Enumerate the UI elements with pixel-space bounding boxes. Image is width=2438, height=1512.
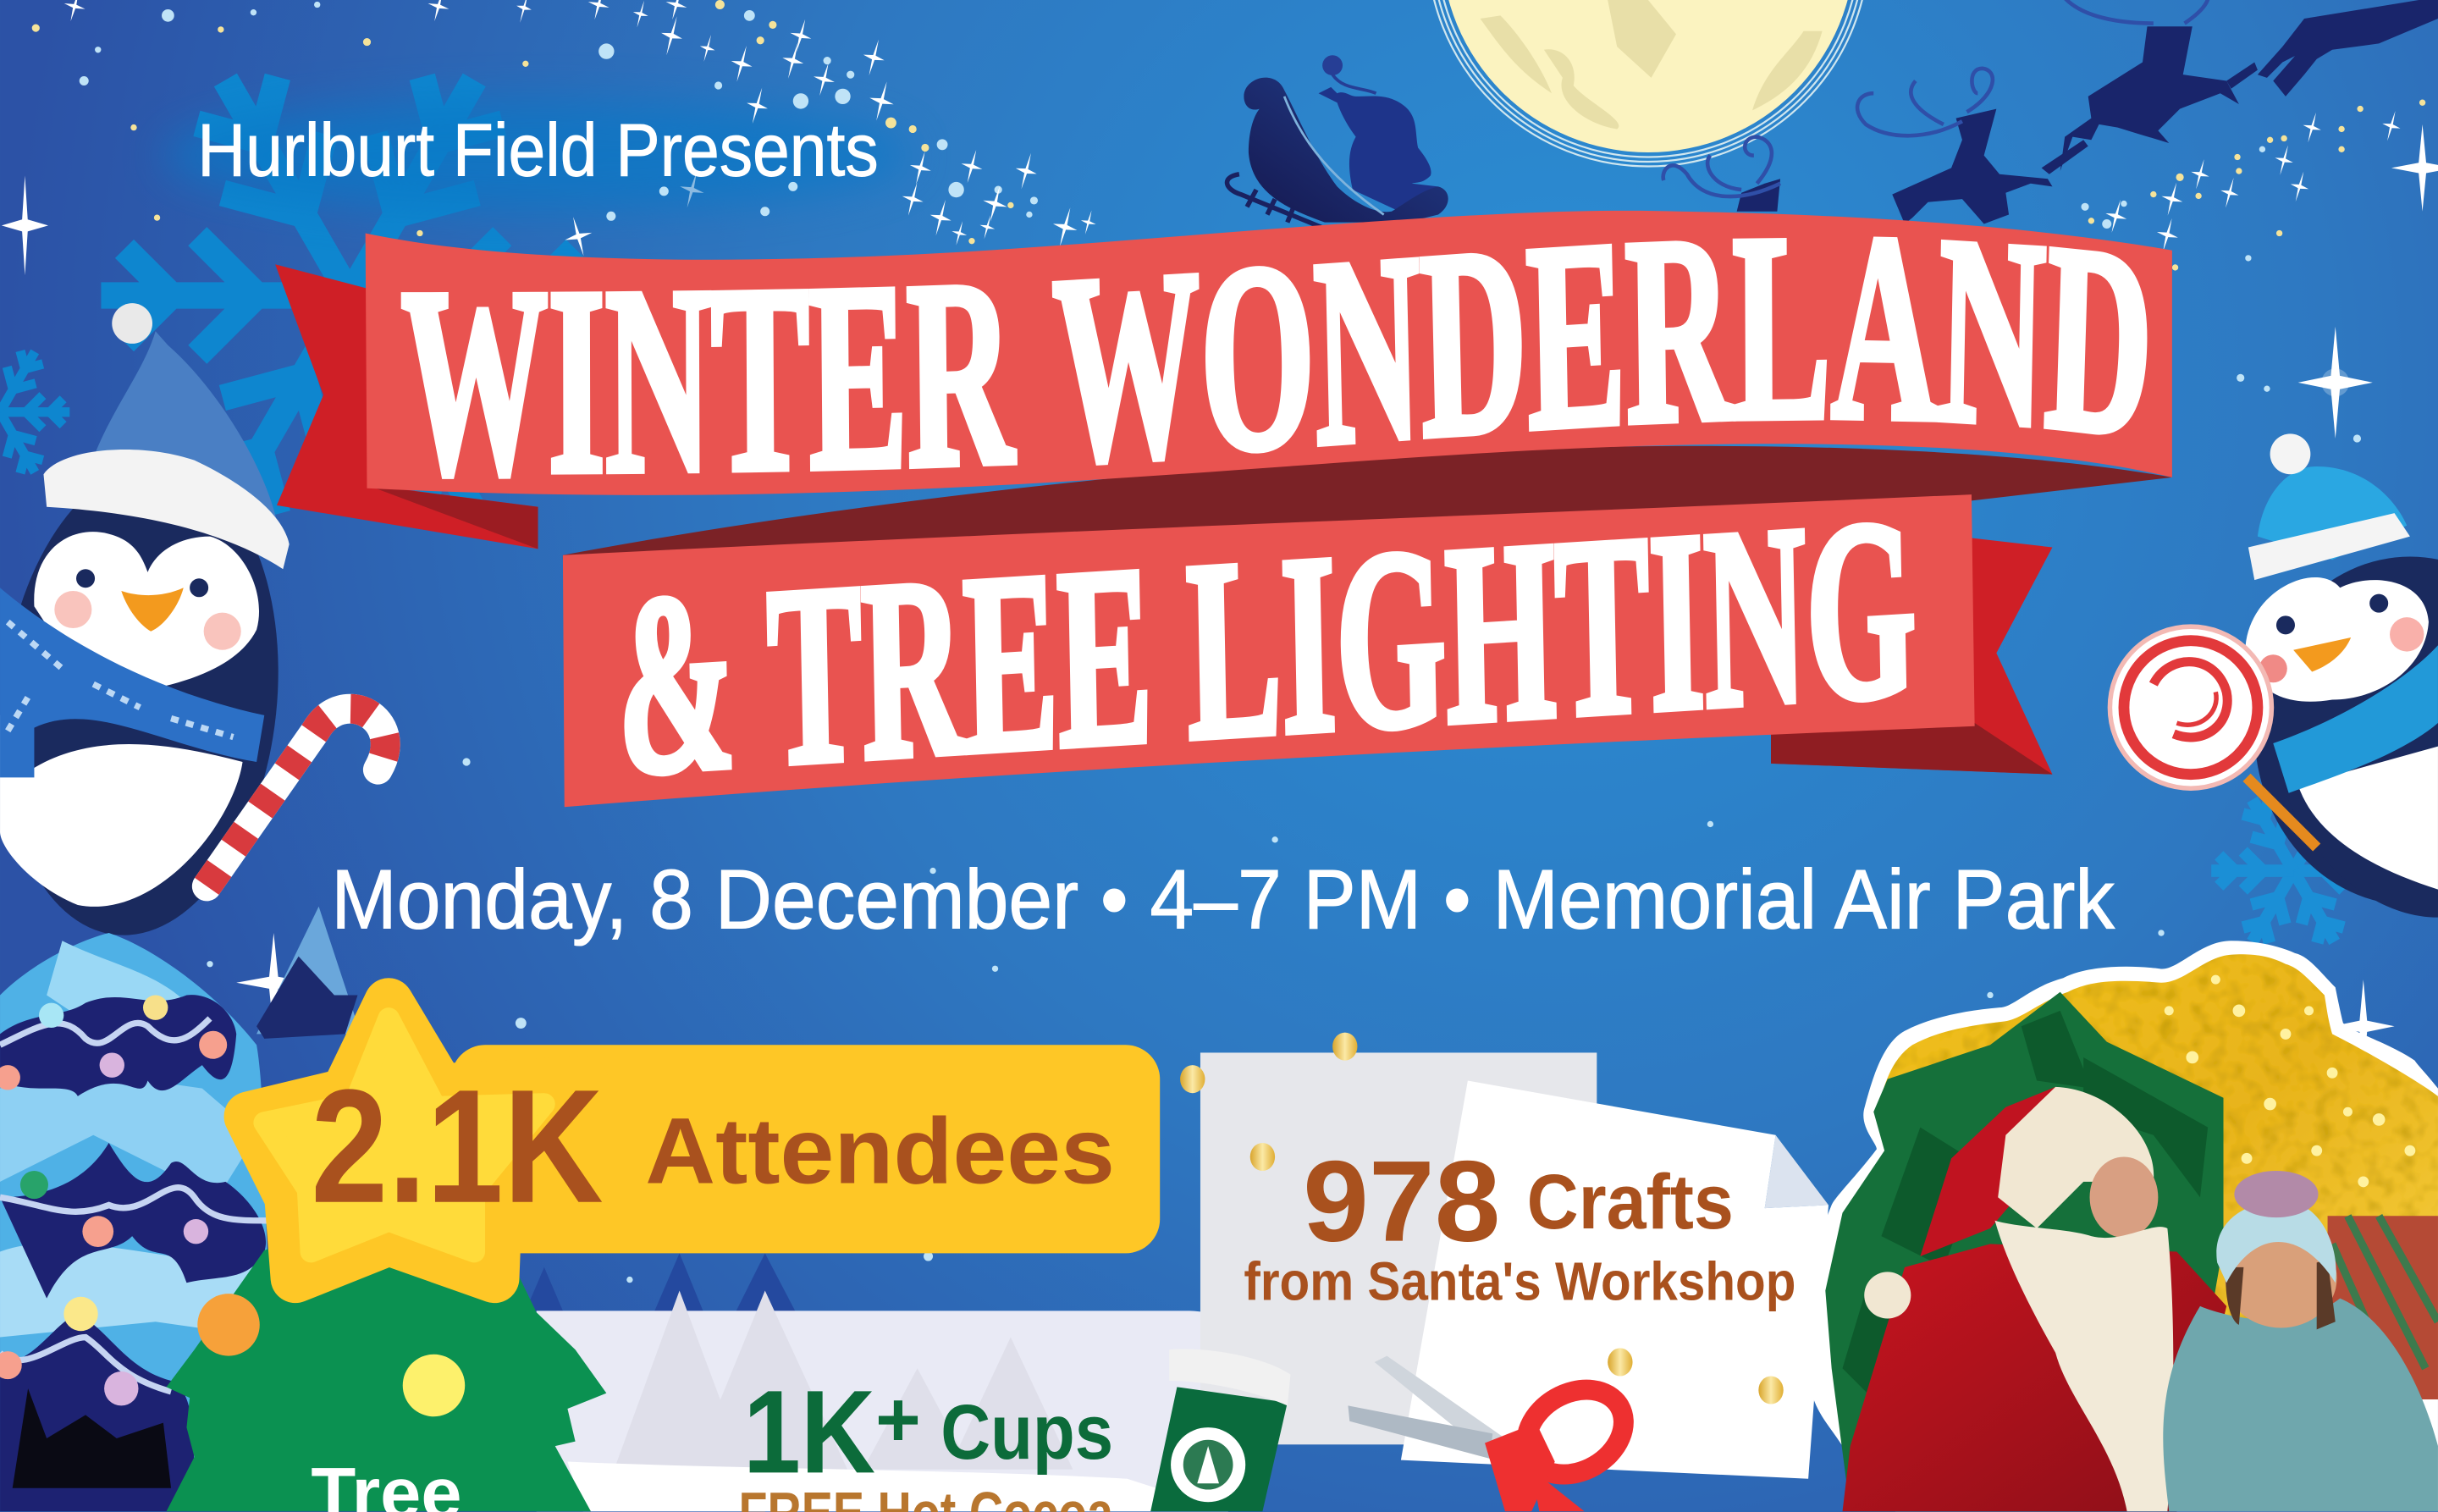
ribbon bottom band (563, 494, 1975, 807)
sparkle stars (2, 0, 2438, 1073)
hat pompom (112, 303, 152, 344)
crafts text (1244, 1137, 1795, 1311)
navy band three (0, 1314, 195, 1511)
black patch (13, 1388, 171, 1488)
santa pompom (1864, 1272, 1911, 1319)
presenter line: Hurlburt Field Presents (197, 108, 879, 192)
white paper (1401, 1081, 1828, 1479)
ribbon shadow (563, 446, 2172, 560)
panel: crafts papers (1180, 1033, 1828, 1479)
hat pompom (2270, 433, 2310, 474)
child coat (2163, 1299, 2438, 1511)
beak (121, 588, 184, 632)
white border (1808, 941, 2438, 1511)
scarf pattern (8, 622, 234, 737)
belly (2298, 747, 2438, 890)
ribbon tail left (275, 264, 538, 549)
decorated tree left (0, 933, 268, 1511)
big snowflake left (101, 51, 598, 540)
santa hat fur (1998, 1087, 2154, 1228)
gold background (1878, 954, 2438, 1399)
sleigh body (1244, 78, 1448, 223)
body (2254, 557, 2438, 905)
penguin right (2245, 433, 2438, 918)
star (249, 1003, 583, 1278)
scissors (1348, 1356, 1639, 1511)
santa figure (1319, 87, 1438, 212)
santa face (2090, 1156, 2158, 1238)
scarf (2273, 645, 2438, 793)
reindeer team (1737, 0, 2438, 223)
lollipop (2110, 626, 2317, 847)
paper fold (1765, 1135, 1828, 1208)
crafts text: from Santa's Workshop (1244, 1250, 1795, 1311)
belly (0, 692, 243, 907)
small background tree (256, 907, 361, 1039)
snow layer top (0, 933, 268, 1511)
beak (2293, 637, 2351, 671)
crafts text: Crafts (1527, 1159, 1734, 1245)
candy cane (207, 709, 385, 886)
title line 1: WINTER WONDERLAND (401, 237, 2147, 479)
navy band one (0, 995, 236, 1096)
attendees text: Attendees (645, 1100, 1115, 1204)
ribbon fold right (1771, 723, 2052, 775)
santa hat (1920, 1087, 2083, 1256)
green chair (1825, 992, 2224, 1511)
ribbon banner (275, 211, 2172, 807)
hat band (2248, 513, 2410, 580)
attendees text (311, 1057, 1115, 1237)
snowflake right (2211, 790, 2375, 952)
attendees text: 2.1K (311, 1057, 604, 1237)
trees behind snow panel (521, 1253, 801, 1322)
crafts text: 978 (1303, 1137, 1500, 1266)
runner (1227, 174, 1325, 229)
moon (1427, 0, 1869, 167)
sleigh silhouette (1227, 55, 1448, 229)
glow behind presenter line (163, 100, 909, 212)
gift box (2328, 1216, 2438, 1399)
eyes (76, 569, 95, 588)
hot cocoa text: 1K (743, 1366, 875, 1498)
bulbs (39, 1003, 63, 1028)
hot cocoa text: + (875, 1377, 921, 1463)
small snowflake left (0, 344, 69, 481)
garlands (0, 1018, 210, 1045)
hot cocoa text: Cups (940, 1389, 1113, 1476)
chair shading (1843, 1011, 2208, 1399)
green tree (167, 1213, 606, 1512)
panel: hot cocoa (537, 1290, 1228, 1511)
santa coat (1843, 1244, 2226, 1511)
photo: santa and child (1808, 941, 2438, 1511)
pale trees (615, 1290, 1073, 1470)
back paper (1200, 1052, 1597, 1444)
hat band (43, 450, 290, 569)
ribbon fold left (367, 485, 538, 549)
hat cone (91, 331, 277, 521)
face (34, 532, 259, 697)
child hair (2226, 1260, 2336, 1329)
yellow sky dots (32, 0, 2425, 271)
child hat (2216, 1200, 2336, 1283)
gold dots (1332, 1033, 1357, 1061)
cheeks (2259, 654, 2287, 682)
child face (2225, 1228, 2337, 1328)
reindeer antlers (1663, 0, 2209, 196)
eyes (2276, 615, 2295, 634)
gold lights (2165, 975, 2415, 1202)
penguin left (0, 303, 301, 949)
ornament orange (197, 1294, 260, 1356)
navy band two (0, 1143, 266, 1299)
ribbon top band (366, 211, 2172, 495)
attendees pill (451, 1045, 1160, 1253)
ornament yellow (403, 1355, 465, 1416)
scarf (0, 588, 264, 777)
hat (2258, 466, 2407, 560)
child hat pom (2234, 1171, 2319, 1217)
santa pompom (1322, 55, 1343, 75)
title line 2: & TREE LIGHTING (624, 522, 1915, 777)
snow hill (567, 1461, 1228, 1511)
santa beard (1995, 1221, 2173, 1511)
cheeks (54, 591, 91, 628)
face (2245, 577, 2429, 702)
body (0, 450, 301, 949)
sky dots (80, 2, 2361, 1283)
event details line: Monday, 8 December • 4–7 PM • Memorial Air Park (331, 853, 2115, 947)
ribbon tail right (1771, 538, 2052, 775)
hot cocoa text (738, 1366, 1114, 1512)
coffee cup (1150, 1349, 1290, 1511)
